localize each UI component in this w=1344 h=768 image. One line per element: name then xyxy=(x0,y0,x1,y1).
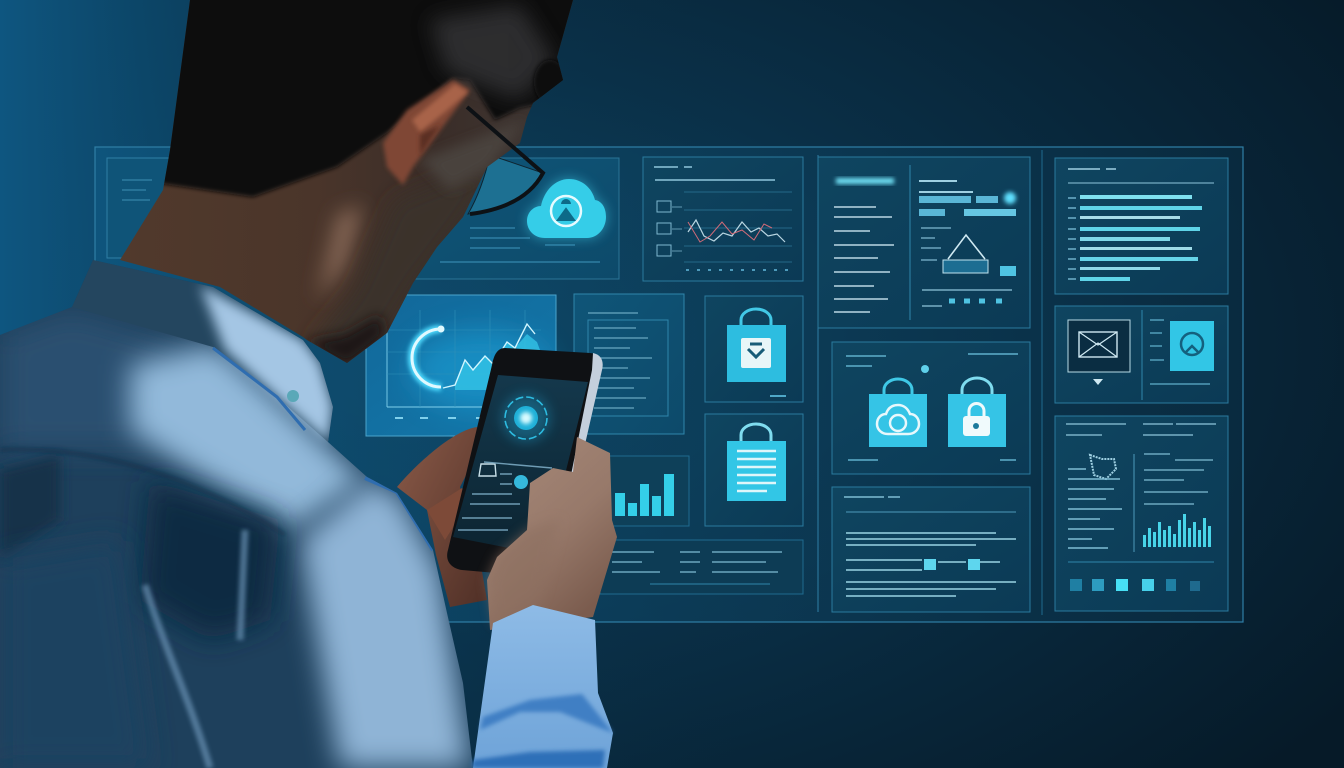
panel: mail and badge xyxy=(1055,306,1228,403)
mini bar chart xyxy=(1143,514,1211,547)
area chart xyxy=(455,334,540,390)
panel: report with bar chart xyxy=(1055,416,1228,611)
shirt cuff xyxy=(472,605,613,768)
icon: padlock bag xyxy=(948,378,1006,447)
icon: envelope xyxy=(1068,320,1130,385)
panel: top left fragment xyxy=(107,158,227,258)
icon row xyxy=(1070,579,1200,591)
panel: bag list card xyxy=(705,414,803,526)
panel: growth chart xyxy=(366,295,556,436)
person xyxy=(0,0,590,768)
creases xyxy=(145,530,245,768)
icon: shopping bag xyxy=(727,309,786,382)
panel: bar chart xyxy=(605,456,689,526)
panel: text list card xyxy=(574,294,684,434)
holographic dashboard frame xyxy=(95,147,1243,622)
panel: bottom text strip xyxy=(600,540,803,594)
glasses lens xyxy=(468,155,543,214)
icon: bag with lines xyxy=(727,424,786,501)
phone glow icon xyxy=(502,394,550,442)
icon: house xyxy=(943,235,988,273)
panel: cloud card xyxy=(400,158,619,279)
collar xyxy=(100,299,330,442)
glasses temple xyxy=(467,107,543,214)
icon: cloud xyxy=(527,179,606,238)
icon: badge xyxy=(1170,321,1214,371)
panel: two locks xyxy=(832,342,1030,474)
left hand xyxy=(397,427,487,607)
dark centre xyxy=(140,480,280,640)
lit sleeve xyxy=(300,480,470,768)
icon: cloud bag xyxy=(869,379,927,447)
panel: bag lock card xyxy=(705,296,803,402)
sleeve edge piping xyxy=(365,478,433,550)
hair mass xyxy=(150,0,590,197)
line series xyxy=(688,220,785,242)
neck highlight xyxy=(318,205,362,300)
right hand xyxy=(487,437,617,630)
head xyxy=(120,0,573,363)
lit shoulder xyxy=(130,345,365,530)
panel: text report xyxy=(832,487,1030,612)
panel: documents with house xyxy=(818,157,1030,328)
panel: line chart xyxy=(643,157,803,281)
beard xyxy=(324,174,484,349)
icon: glowing arc xyxy=(412,326,444,387)
ear xyxy=(383,80,470,185)
shirt body xyxy=(0,250,480,768)
phone xyxy=(447,348,603,576)
panel: bar list xyxy=(1055,158,1228,294)
